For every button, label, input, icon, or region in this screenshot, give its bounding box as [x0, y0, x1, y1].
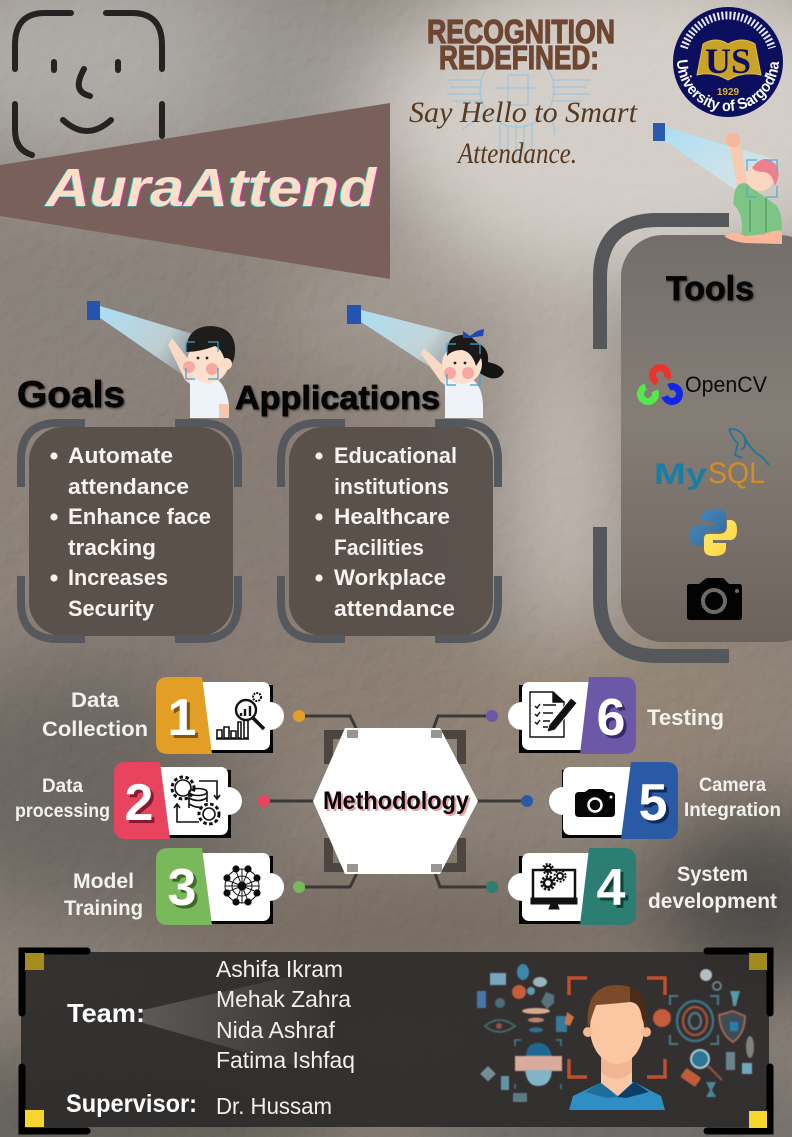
illustration: man with face scan frame [569, 978, 665, 1110]
icon: Python logo [690, 509, 737, 556]
heading: Recognition Redefined [409, 13, 638, 170]
goals list: Enhance face [68, 504, 211, 529]
label: Model Training [64, 870, 143, 920]
step 5: Camera Integration: 5 [639, 774, 667, 832]
applications list: Facilities [334, 535, 424, 560]
methodology hub: hexagon [313, 728, 478, 874]
label: Supervisor: Supervisor: [66, 1090, 197, 1118]
heading: Recognition Redefined: REDEFINED: [439, 39, 599, 76]
icon: face recognition frame [15, 13, 162, 155]
step 6: Testing [486, 677, 724, 754]
heading: Goals: Goals [17, 374, 125, 415]
icon: monitor with gears [531, 864, 577, 909]
title banner: AuraAttend: AuraAttend [43, 158, 376, 218]
decorative corner: bottom-left [22, 1067, 87, 1131]
step 5: Camera Integration [521, 762, 781, 839]
decorative corner: bottom-right [707, 1067, 770, 1131]
label: Model Training: Model [73, 870, 134, 893]
icon: OpenCV logo [638, 365, 767, 404]
title banner: AuraAttend: AuraAttend [44, 158, 377, 218]
logo: University of Sargodha [673, 7, 783, 117]
icon: faint circuit motif [447, 53, 590, 155]
label: Camera Integration: Integration [684, 800, 781, 821]
label: Data Collection [42, 689, 148, 741]
panel: tools [600, 220, 792, 656]
label: Camera Integration [684, 775, 781, 821]
icon: OpenCV logo: OpenCV [685, 372, 767, 397]
label: Data Collection: Collection [42, 718, 148, 741]
team names: Fatima Ishfaq [216, 1047, 355, 1073]
label: Model Training: Training [64, 897, 143, 920]
goals list: Security [68, 596, 155, 621]
label: Camera Integration: Camera [699, 775, 766, 796]
logo: University of Sargodha: University of Sargodha [677, 60, 780, 112]
decorative corner: top-left [22, 951, 87, 1013]
step 2: Data processing: 2 [125, 774, 153, 832]
illustration: girl at face scanner [347, 305, 504, 418]
methodology hub: hexagon: Methodology [325, 789, 471, 817]
step 3: Model Training [64, 848, 305, 925]
label: Testing: Testing [647, 705, 724, 730]
icon: MySQL logo: My [654, 458, 707, 491]
label: System development: development [648, 890, 777, 913]
decorative corner: top-right [707, 951, 770, 1013]
step 4: System development [486, 848, 777, 925]
goals list: attendance [68, 474, 189, 499]
icon: gears and database [172, 777, 220, 824]
logo: University of Sargodha: 1929 [717, 87, 740, 98]
icon: MySQL logo [654, 429, 769, 491]
icon: neural network [223, 865, 261, 906]
icon: camera [575, 789, 615, 817]
panel: team [21, 951, 770, 1131]
team names: Mehak Zahra [216, 986, 351, 1012]
supervisor name: Dr. Hussam [216, 1093, 332, 1119]
decorative bracket: tools top [600, 220, 729, 349]
step 3: Model Training: 3 [168, 859, 196, 917]
panel: goals [21, 423, 238, 639]
illustration: boy at face scanner [87, 301, 235, 418]
icon: analytics magnifier [216, 693, 264, 739]
step 1: Data Collection [42, 677, 305, 754]
title banner: AuraAttend [0, 103, 390, 279]
heading: Tools: Tools [666, 270, 754, 308]
heading: Recognition Redefined: Attendance. [456, 137, 577, 170]
label: Team: Team: [67, 998, 145, 1028]
panel: applications [281, 423, 498, 639]
heading: Recognition Redefined: RECOGNITION [427, 13, 615, 50]
goals list: Automate [68, 443, 173, 468]
team names: Nida Ashraf [216, 1017, 336, 1043]
goals list [50, 443, 211, 621]
icon: camera [687, 578, 742, 620]
logo: University of Sargodha: US [705, 41, 751, 81]
decorative bracket: tools bottom [600, 527, 729, 656]
title banner: AuraAttend: AuraAttend [45, 158, 378, 218]
label: Data processing [15, 776, 110, 822]
goals list: tracking [68, 535, 156, 560]
methodology hub: hexagon: Methodology [323, 787, 469, 815]
icon: MySQL logo: SQL [708, 457, 765, 490]
heading: Applications: Applications [235, 379, 440, 416]
label: Data processing: Data [42, 776, 83, 797]
team names: Ashifa Ikram [216, 956, 343, 982]
label: Data Collection: Data [71, 689, 119, 712]
icon: checklist with pen [530, 692, 577, 737]
label: Data processing: processing [15, 801, 110, 822]
illustration: biometric technology icons [477, 964, 754, 1102]
applications list: Educational [334, 443, 457, 468]
team names [216, 956, 355, 1073]
applications list: attendance [334, 596, 455, 621]
goals list: Increases [68, 565, 168, 590]
applications list [315, 443, 457, 621]
step 1: Data Collection: 1 [168, 689, 196, 747]
label: System development [648, 863, 777, 913]
label: System development: System [677, 863, 748, 886]
applications list: institutions [334, 474, 449, 499]
methodology connectors [270, 716, 521, 887]
illustration: green shirt person at face scanner [653, 123, 782, 244]
step 6: Testing: 6 [597, 689, 625, 747]
step 4: System development: 4 [597, 859, 626, 917]
applications list: Healthcare [334, 504, 450, 529]
heading: Recognition Redefined: Say Hello to Smart [409, 96, 638, 129]
step 2: Data processing [15, 762, 270, 839]
applications list: Workplace [334, 565, 446, 590]
